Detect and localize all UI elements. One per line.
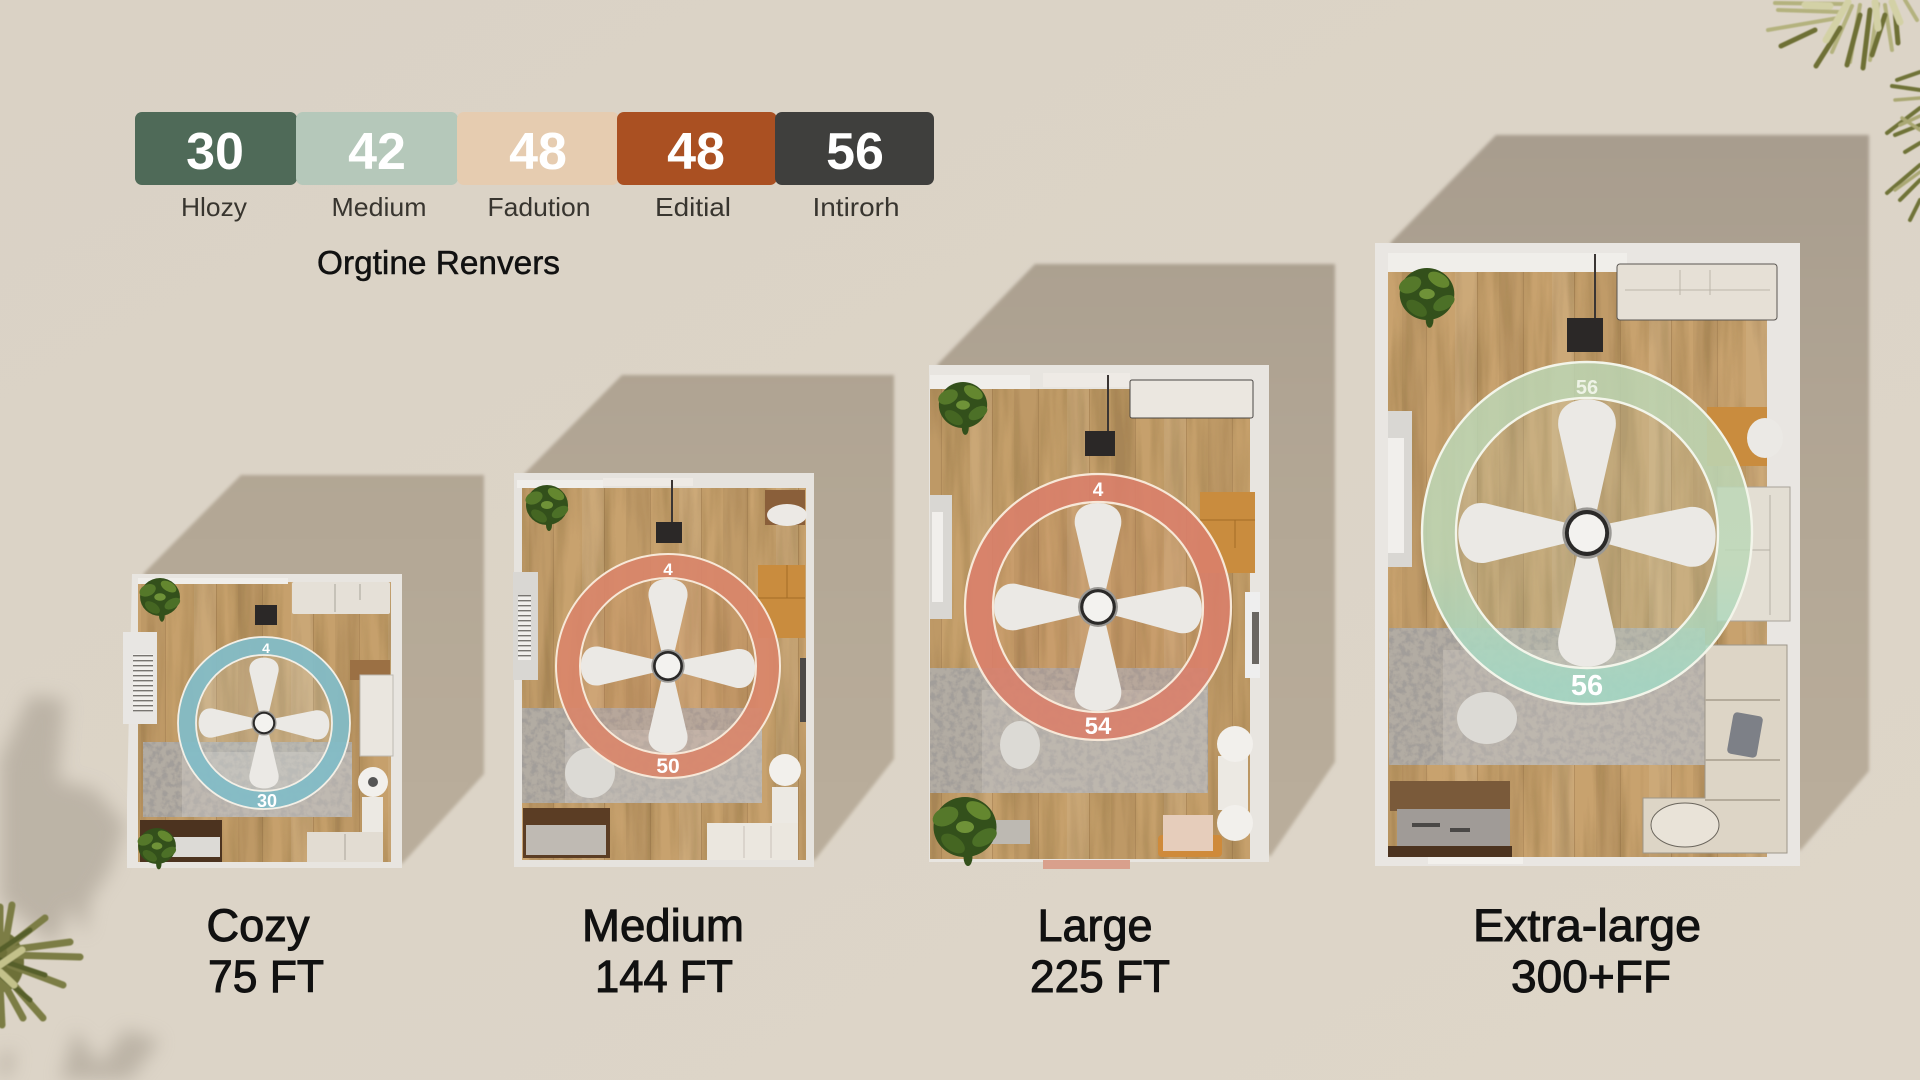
palm shadow bottom left: [0, 695, 160, 1080]
legend labels: Fadution: [488, 192, 590, 222]
room: medium: [513, 473, 814, 867]
room: cozy: [123, 574, 402, 869]
wood floor: [1388, 272, 1767, 857]
legend labels: Intirorh: [812, 192, 900, 222]
caption: medium: Medium: [582, 900, 744, 951]
furniture: [1388, 253, 1790, 864]
ring chart 30: 4: [262, 640, 270, 656]
legend swatch 42: [296, 112, 458, 185]
caption: extra-large: Extra-large: [1473, 900, 1701, 951]
rug: [143, 742, 352, 817]
caption: extra-large: 300+FF: [1511, 951, 1671, 1002]
room walls: [1375, 243, 1800, 866]
ring chart 50: 50: [656, 755, 680, 778]
room walls: [929, 365, 1269, 862]
caption: large: [1030, 900, 1170, 1002]
ring chart 54: [965, 474, 1231, 740]
rug: [1389, 628, 1705, 765]
rug: [930, 668, 1208, 793]
ring chart 54: 54: [1085, 713, 1112, 740]
legend swatch 30: 30: [186, 123, 244, 181]
room: large: [929, 365, 1269, 869]
legend swatch 56: [775, 112, 934, 185]
room walls: [127, 574, 402, 868]
legend labels: Hlozy: [181, 192, 247, 222]
furniture: [123, 578, 393, 862]
rug: [522, 708, 762, 803]
ring chart 54: 4: [1093, 480, 1104, 501]
legend swatch 42: 42: [348, 123, 406, 181]
ring chart 50: 4: [663, 560, 673, 579]
caption: medium: [582, 900, 744, 1002]
furniture: [513, 478, 807, 860]
room: extra-large: [1375, 243, 1800, 866]
caption: large: Large: [1038, 900, 1152, 951]
room walls: [514, 473, 814, 867]
plant: [1396, 268, 1457, 328]
wood floor: [522, 488, 806, 860]
ring chart 56: [1422, 362, 1752, 704]
wood floor: [138, 582, 391, 862]
legend bar: [135, 112, 934, 185]
caption: cozy: 75 FT: [208, 951, 324, 1002]
wood floor: [930, 389, 1250, 859]
palm frond top right: [1768, 0, 1920, 220]
caption: extra-large: [1473, 900, 1701, 1002]
legend swatch 30: [135, 112, 297, 185]
ring chart 30: 30: [257, 791, 277, 811]
legend labels: Medium: [332, 192, 426, 222]
plants: [929, 382, 1000, 866]
room shadows: [143, 135, 1869, 864]
legend caption: Orgtine Renvers: [317, 244, 560, 281]
caption: cozy: [206, 900, 324, 1002]
ring chart 50: [556, 554, 780, 778]
plants: [136, 578, 182, 869]
legend swatch 48 light: 48: [509, 123, 567, 181]
caption: large: 225 FT: [1030, 951, 1170, 1002]
legend swatch 48 light: [457, 112, 619, 185]
furniture: [930, 373, 1260, 869]
palm plant bottom left: [0, 905, 80, 1025]
ring chart 56: 56: [1571, 670, 1603, 702]
plant: [523, 485, 570, 531]
legend labels: [181, 192, 900, 222]
legend swatch 48 rust: 48: [667, 123, 725, 181]
caption: cozy: Cozy: [206, 900, 310, 951]
legend swatch 48 rust: [617, 112, 777, 185]
ring chart 56: 56: [1576, 377, 1598, 399]
legend swatch 56: 56: [826, 123, 884, 181]
ring chart 30: [178, 637, 350, 811]
caption: medium: 144 FT: [595, 951, 733, 1002]
legend labels: Editial: [655, 192, 731, 222]
